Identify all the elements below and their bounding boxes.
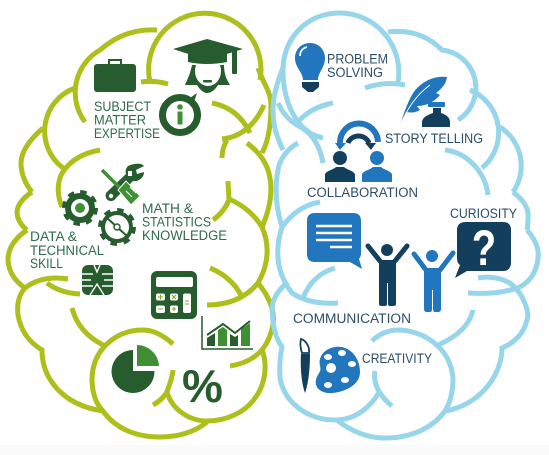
icon: screwdriver and wrench — [102, 164, 144, 205]
text: math and statistics knowledge: MATH & — [142, 201, 193, 216]
icon: calculator — [151, 271, 197, 319]
icon: collaboration arrows — [335, 124, 378, 150]
text: problem solving: SOLVING — [327, 65, 383, 80]
left brain outline — [8, 13, 273, 437]
icon: palette — [316, 347, 360, 393]
icon: question bubble: ? — [472, 220, 496, 276]
text: problem solving: PROBLEM — [327, 52, 388, 66]
text: story telling: STORY TELLING — [385, 131, 483, 146]
icon: graduate with cap — [173, 39, 243, 93]
text: subject matter expertise: EXPERTISE — [94, 126, 160, 141]
text: curiosity: CURIOSITY — [450, 206, 517, 221]
icon: question bubble — [455, 220, 511, 278]
text: data and technical skill: SKILL — [30, 256, 63, 271]
text: subject matter expertise: MATTER — [94, 112, 146, 128]
icon: chip — [82, 265, 113, 295]
text: creativity: CREATIVITY — [362, 351, 432, 366]
icon: speech bubble — [307, 213, 362, 269]
icon: gear large — [64, 192, 96, 224]
icon: feather and ink bottle — [400, 77, 450, 127]
icon: briefcase — [94, 60, 136, 92]
right brain outline — [272, 13, 538, 438]
text: problem solving — [327, 52, 388, 80]
icon: light bulb — [295, 43, 325, 92]
icon: line and bar chart — [202, 316, 253, 349]
text: subject matter expertise — [94, 99, 160, 141]
icon: dark person raising arms — [368, 244, 407, 306]
icon: percent sign: % — [182, 360, 223, 412]
text: math and statistics knowledge: KNOWLEDGE — [142, 228, 227, 243]
icon: two people — [325, 151, 392, 182]
icon: paintbrush — [300, 339, 310, 393]
text: math and statistics knowledge: STATISTICS — [142, 214, 211, 230]
icon: blue person raising arms — [414, 250, 453, 312]
text: data and technical skill — [30, 229, 104, 271]
text: data and technical skill: TECHNICAL — [30, 243, 104, 258]
text: math and statistics knowledge — [142, 201, 227, 243]
text: data and technical skill: DATA & — [30, 229, 77, 244]
text: communication: COMMUNICATION — [293, 311, 411, 326]
text: subject matter expertise: SUBJECT — [94, 99, 151, 114]
icon: pie chart — [112, 345, 159, 393]
icon: info bubble — [162, 93, 198, 132]
text: collaboration: COLLABORATION — [307, 185, 418, 200]
icon: gear small — [100, 210, 134, 244]
